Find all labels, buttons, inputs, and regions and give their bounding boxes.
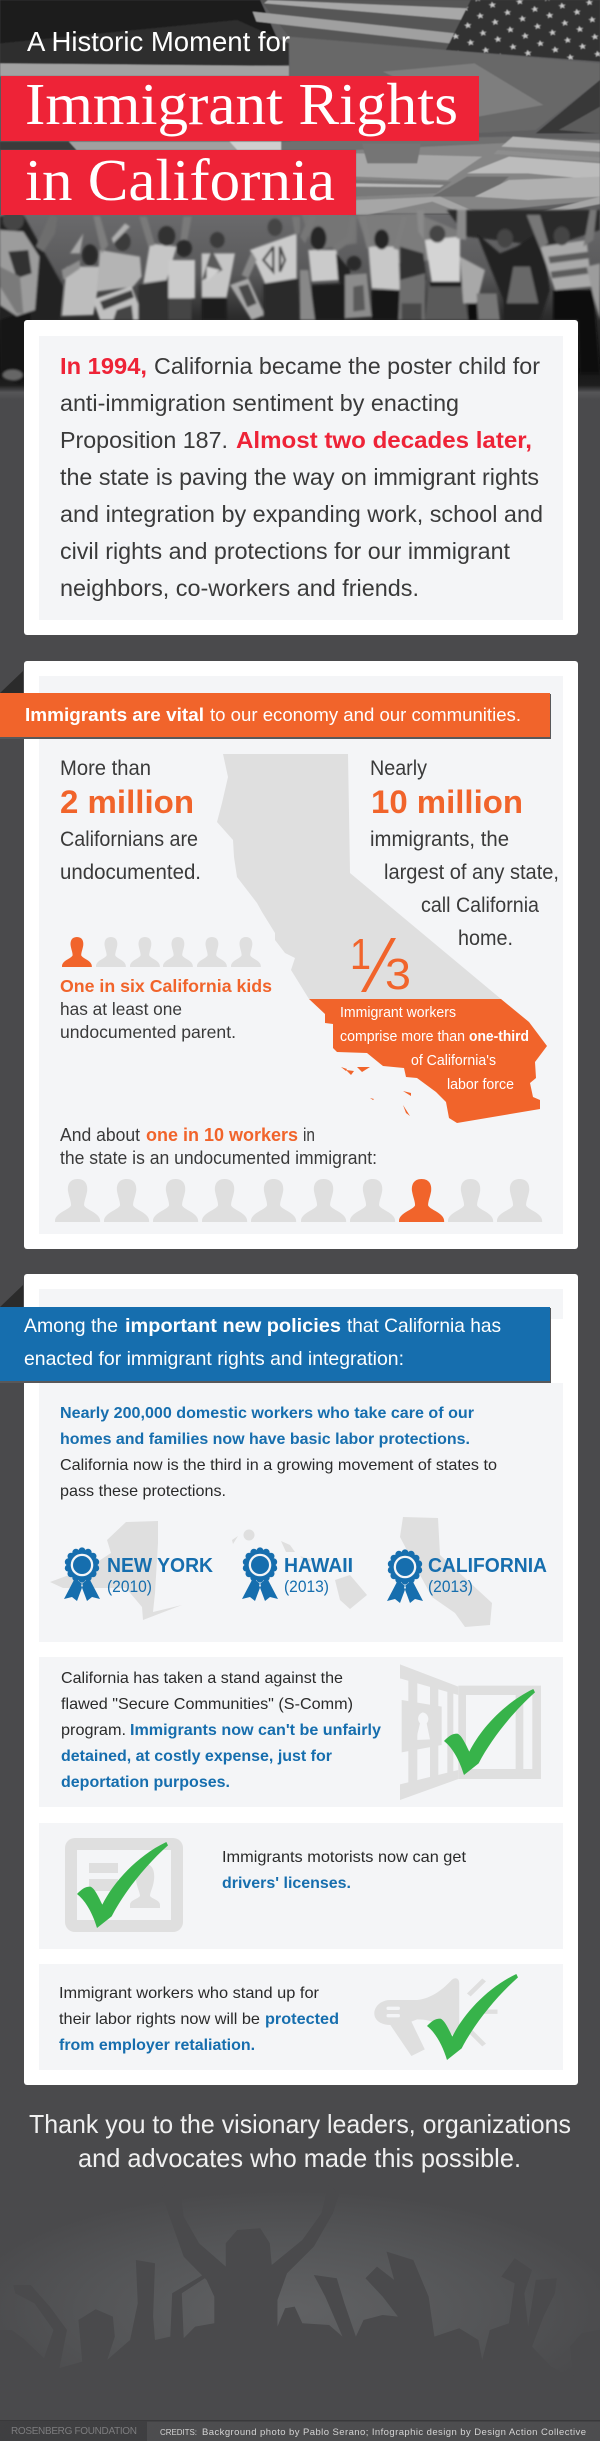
icon: open jail cell door with check mark xyxy=(400,1664,541,1800)
award: California: (2013) xyxy=(428,1578,473,1596)
subtitle: A Historic Moment for: A Historic Moment for xyxy=(27,26,290,57)
card: employer retaliation xyxy=(39,1964,563,2070)
map of California, upper part xyxy=(217,754,501,999)
orange ribbon banner xyxy=(0,671,551,739)
footer: Rosenberg Foundation: ROSENBERG FOUNDATION xyxy=(11,2426,137,2437)
thank you message xyxy=(29,2109,571,2173)
photo: flags overhead xyxy=(0,0,600,220)
employer retaliation text: from employer retaliation. xyxy=(59,2037,255,2054)
stat: one in 10 workers: one in 10 workers xyxy=(146,1125,298,1145)
employer retaliation text: Immigrant workers who stand up for xyxy=(59,1985,319,2002)
thank you message: Thank you to the visionary leaders, organizations xyxy=(29,2109,571,2139)
intro text: neighbors, co-workers and friends. xyxy=(60,575,419,601)
intro text: anti-immigration sentiment by enacting xyxy=(60,390,459,416)
crowd silhouette with glow xyxy=(0,2180,600,2441)
footer: credits: CREDITS: xyxy=(160,2428,197,2437)
award: New York: (2010) xyxy=(107,1578,152,1596)
award: California: CALIFORNIA xyxy=(428,1555,547,1577)
domestic workers text: California now is the third in a growing movement of states to xyxy=(60,1457,497,1474)
award: New York: NEW YORK xyxy=(107,1555,214,1577)
employer retaliation text xyxy=(59,1985,339,2054)
fraction: one third: 3 xyxy=(385,950,411,999)
blue ribbon banner: Among the xyxy=(24,1315,118,1337)
thank you message: and advocates who made this possible. xyxy=(78,2143,521,2173)
intro text: Proposition 187. xyxy=(60,427,228,453)
domestic workers text: pass these protections. xyxy=(60,1483,226,1500)
blue ribbon banner xyxy=(0,1285,563,1383)
stat: 10 million: largest of any state, xyxy=(384,861,559,884)
drivers' licenses text: Immigrants motorists now can get xyxy=(222,1849,467,1866)
drivers' licenses text: drivers' licenses. xyxy=(222,1875,351,1892)
fraction: one third xyxy=(350,930,411,999)
stat: 10 million: home. xyxy=(458,927,513,950)
panel: important new policies xyxy=(0,1274,578,2085)
stat: 2 million: More than xyxy=(60,757,151,780)
footer: credits: Background photo by Pablo Serano; Infographic design by Design Action Collective xyxy=(202,2427,586,2438)
red title bar 1: Immigrant Rights xyxy=(25,71,458,137)
card: drivers' licenses xyxy=(39,1823,563,1949)
drivers' licenses text xyxy=(222,1849,467,1892)
callout: immigrant workers one-third: comprise more than xyxy=(340,1029,465,1045)
stat: one in six California kids: undocumented parent. xyxy=(60,1022,236,1042)
callout: immigrant workers one-third: one-third xyxy=(469,1029,529,1045)
footer: Rosenberg Foundation xyxy=(0,2421,147,2441)
stat: one in six California kids xyxy=(60,976,272,1042)
stat: 10 million: call California xyxy=(421,894,539,917)
domestic workers text: Nearly 200,000 domestic workers who take care of our xyxy=(60,1405,474,1422)
stat: one in six California kids: has at least one xyxy=(60,999,182,1019)
title block xyxy=(1,71,479,215)
employer retaliation text: their labor rights now will be xyxy=(59,2011,260,2028)
Secure Communities text: deportation purposes. xyxy=(61,1774,230,1791)
award: New York xyxy=(64,1547,214,1601)
stat: one in 10 workers: the state is an undocumented immigrant: xyxy=(60,1148,377,1168)
icon row: one in ten people xyxy=(55,1179,542,1222)
callout: immigrant workers one-third: of California's xyxy=(411,1053,496,1069)
Secure Communities text: Immigrants now can't be unfairly xyxy=(130,1722,381,1739)
intro text: and integration by expanding work, school and xyxy=(60,501,543,527)
card: domestic workers xyxy=(39,1383,563,1642)
domestic workers text: homes and families now have basic labor protections. xyxy=(60,1431,470,1448)
state shapes: New York, Hawaii, California xyxy=(50,1517,492,1627)
map of California, southern part in orange xyxy=(309,999,547,1123)
employer retaliation text: protected xyxy=(265,2011,339,2028)
callout: immigrant workers one-third xyxy=(340,1005,529,1093)
fraction: one third: 1 xyxy=(350,930,371,979)
icon: ID card with check mark xyxy=(65,1838,183,1932)
stat: 2 million xyxy=(60,757,201,884)
orange ribbon banner: Immigrants are vital xyxy=(25,704,204,725)
footer bar xyxy=(0,2420,600,2441)
intro text: In 1994, xyxy=(60,353,147,379)
intro text: Almost two decades later, xyxy=(236,427,532,453)
award: Hawaii xyxy=(242,1547,353,1601)
background photo: flags and crowd xyxy=(0,0,600,400)
stat: one in 10 workers: in xyxy=(303,1125,315,1145)
orange ribbon banner: to our economy and our communities. xyxy=(210,704,521,725)
stat: 2 million: 2 million xyxy=(60,784,194,820)
callout: immigrant workers one-third: labor force xyxy=(447,1077,514,1093)
stat: 10 million: 10 million xyxy=(371,784,523,820)
stat: 2 million: Californians are xyxy=(60,828,198,851)
Secure Communities text: California has taken a stand against the xyxy=(61,1670,343,1687)
callout: immigrant workers one-third: Immigrant workers xyxy=(340,1005,456,1021)
intro text xyxy=(60,353,543,601)
Secure Communities text xyxy=(61,1670,381,1791)
Secure Communities text: detained, at costly expense, just for xyxy=(61,1748,332,1765)
stat: one in six California kids: One in six California kids xyxy=(60,976,272,996)
photo: sky and ground behind crowd xyxy=(0,215,600,400)
stat: 2 million: undocumented. xyxy=(60,861,201,884)
stat: 10 million: Nearly xyxy=(370,757,427,780)
panel: immigrants are vital xyxy=(0,661,578,1249)
stat: one in 10 workers xyxy=(60,1125,377,1168)
award: Hawaii: (2013) xyxy=(284,1578,329,1596)
icon: megaphone with check mark xyxy=(374,1974,518,2060)
Secure Communities text: program. xyxy=(61,1722,126,1739)
panel: introduction xyxy=(24,320,578,635)
intro text: civil rights and protections for our immigrant xyxy=(60,538,510,564)
Secure Communities text: flawed "Secure Communities" (S-Comm) xyxy=(61,1696,353,1713)
stat: one in 10 workers: And about xyxy=(60,1125,140,1145)
award: California xyxy=(387,1549,547,1603)
award: Hawaii: HAWAII xyxy=(284,1555,353,1577)
blue ribbon banner: important new policies xyxy=(125,1315,341,1337)
photo: crowd right half xyxy=(300,210,600,373)
stat: 10 million: immigrants, the xyxy=(370,828,509,851)
photo: crowd left half xyxy=(0,209,300,383)
blue ribbon banner: that California has xyxy=(347,1315,501,1337)
stat: 10 million xyxy=(370,757,559,950)
intro text: California became the poster child for xyxy=(154,353,540,379)
blue ribbon banner: enacted for immigrant rights and integration: xyxy=(24,1348,404,1370)
icon row: one in six people xyxy=(62,937,261,967)
domestic workers text xyxy=(60,1405,497,1500)
intro text: the state is paving the way on immigrant rights xyxy=(60,464,539,490)
card: Secure Communities xyxy=(39,1657,563,1807)
red title bar 2: in California xyxy=(25,147,335,213)
